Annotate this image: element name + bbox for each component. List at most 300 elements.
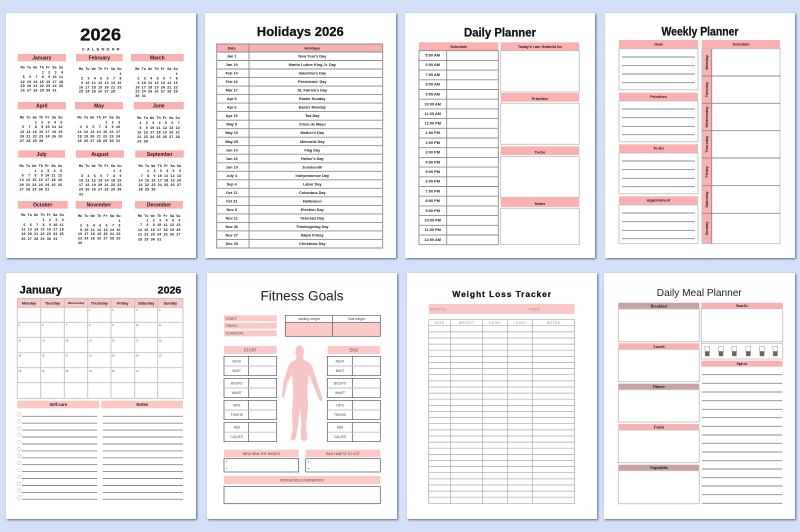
month: April: 6 7 8 9 10 11 12 [20,126,62,130]
section: to-do [501,146,579,197]
month: November: 1 [78,220,120,224]
month: December: Mo Tu We Th Fr Sa Su [138,214,180,219]
section: appointment [619,196,698,244]
month: February [76,54,123,94]
end measurements: THIGHS [334,413,346,417]
schedule table: 5:00 PM [426,170,440,174]
month: September: 21 22 23 24 25 26 27 [138,184,181,188]
month: June: 29 30 [137,140,148,144]
holidays table: Nov 26 [225,225,238,229]
end measurements: HIPS [336,404,344,408]
month grid: 11 [159,324,162,327]
section: dinner: Dinner [653,384,665,389]
schedule table [419,42,498,245]
month grid: 5 [18,324,20,327]
month grid: Thursday [91,301,109,305]
month grid: 18 [159,340,162,342]
month grid: 30 [112,370,115,373]
holidays table: May 10 [225,131,238,135]
month: October [18,201,68,242]
title: weight loss tracker: Weight Loss Tracker [452,289,552,299]
holidays table: Nov 3 [227,208,237,212]
holidays table: July 4 [226,174,238,178]
holidays table: Jun 19 [226,165,238,169]
panel: weight loss tracker [407,273,597,519]
month: May: 11 12 13 14 15 16 17 [78,131,120,135]
month: February: 16 17 18 19 20 21 22 [79,86,121,90]
month: April: 1 2 3 4 5 [20,122,62,126]
month: August: 24 25 26 27 28 29 30 [79,189,121,193]
month grid: Saturday [138,301,155,305]
section: priorities: Priorities [532,97,548,101]
month: July [18,150,65,192]
month: December: 28 29 30 31 [138,238,161,242]
month: May: 4 5 6 7 8 9 10 [78,126,120,130]
month grid: 7 [66,324,68,327]
holidays table: Jun 16 [226,157,238,161]
tracker table: NOTES [547,321,560,325]
month: February: 1 [79,73,121,77]
start measurements: BICEPS [231,382,243,386]
month: June: 22 23 24 25 26 27 28 [137,136,180,140]
month grid: 27 [42,370,45,373]
section: priorities [501,93,579,144]
month grid: 3 [136,309,138,312]
bad habits to cut [306,450,380,472]
month: February: 2 3 4 5 6 7 8 [79,78,121,82]
month: August [76,150,124,198]
month: May: 18 19 20 21 22 23 24 [78,136,121,140]
month: November: 30 [78,242,82,246]
start finish duration fields: DURATION: [226,332,244,336]
section: spices lines [701,361,783,503]
section: notes [501,198,579,244]
panel: january monthly planner [6,273,196,519]
section: breakfast: Breakfast [651,303,668,308]
month grid: 13 [42,340,45,342]
section: to-do: To-Do [653,147,665,151]
heading: 2026: 2026 [158,284,181,296]
month grid: 29 [89,370,92,373]
month: June: Mo Tu We Th Fr Sa Su [137,116,180,121]
month: April: 20 21 22 23 24 25 26 [20,136,62,140]
month grid: 12 [18,340,22,342]
holidays table: Holidays [304,46,320,50]
holidays table: Labor Day [303,182,322,186]
subtitle: calendar: CALENDAR [82,46,120,51]
month: December: 14 15 16 17 18 19 20 [138,229,180,233]
section: grateful [501,42,579,92]
panel: fitness goals [207,273,397,519]
title: 2026: 2026 [80,25,121,45]
title: fitness goals: Fitness Goals [260,288,344,304]
month: January: Mo Tu We Th Fr Sa Su [20,66,63,70]
month: February: 23 24 25 26 27 28 [79,90,115,94]
section: to-do [619,144,698,194]
holidays table: Valentine's Day [298,72,327,76]
month grid: 10 [136,324,139,327]
section: lunch: Lunch [653,344,665,349]
holidays table: Date [228,46,236,50]
january sheet [6,273,196,519]
month: March: 9 10 11 12 13 14 15 [135,82,178,86]
holidays table: Mother's Day [300,131,325,135]
panel: daily meal planner [604,273,795,519]
schedule table: 11:00 PM [425,228,441,232]
month: June: June [153,104,165,110]
month and year bar: YEAR: [528,308,542,312]
schedule table: 11:00 AM [425,112,441,116]
month: October: Mo Tu We Th Fr Sa Su [21,213,64,218]
month: February: February [89,56,110,62]
calendar sheet [6,13,196,258]
month: April [18,102,66,144]
holidays table: Jan 19 [226,63,238,67]
panel: daily planner [405,13,595,258]
section: appointment: Appointment [647,199,671,203]
month grid: 9 [112,324,114,327]
month: May: 1 2 3 [78,122,120,126]
month: August: 3 4 5 6 7 8 9 [79,175,121,179]
month: July: July [37,152,47,158]
section: breakfast [618,303,699,342]
section: schedule [702,40,780,244]
end measurements: WAIST [335,391,345,395]
holidays table: Apr 6 [227,106,237,110]
section: lunch [618,343,699,382]
schedule table: 7:00 AM [425,73,440,77]
section: schedule: Schedule [733,42,749,46]
fitness sheet [207,273,397,519]
month: December [135,201,183,242]
start finish duration fields: FINISH: [226,324,238,328]
month: July: 13 14 15 16 17 18 19 [20,179,62,183]
month: February: 9 10 11 12 13 14 15 [79,82,121,86]
month grid: 15 [89,340,92,342]
tracker table [429,320,575,504]
month: November: 9 10 11 12 13 14 15 [78,229,120,233]
tracker sheet [407,273,597,519]
month: March: 16 17 18 19 20 21 22 [135,86,178,90]
holidays table: Jan 1 [227,55,237,59]
holidays table: St. Patrick's Day [297,89,328,93]
month: September [135,150,184,193]
icon: body silhouette [282,345,323,441]
month: February: Mo Tu We Th Fr Sa Su [79,67,121,72]
title: daily planner: Daily Planner [464,28,537,40]
month: July: 20 21 22 23 24 25 26 [20,184,62,188]
start finish duration fields: START: [226,317,237,321]
month: May [75,102,123,144]
holidays table: Apr 5 [227,97,237,101]
end measurements: BUST [336,369,344,373]
month grid: 8 [89,324,91,327]
start measurements: BUST [232,369,241,373]
weight table: starting weight [298,317,320,321]
holidays table [217,44,383,248]
month grid: 25 [159,354,162,358]
panel: yearly calendar 2026 [6,13,196,258]
holidays sheet [205,13,396,258]
month: May: May [94,104,104,110]
holidays table: Thanksgiving Day [296,225,329,229]
month grid: 21 [66,354,69,358]
month: November [76,201,122,246]
section: schedule: Tuesday [705,81,709,97]
month: June [134,102,184,144]
month grid: 16 [112,340,115,342]
holidays table: Dec 25 [226,242,238,246]
bad habits to cut: BAD HABITS TO CUT [326,452,360,456]
start finish duration fields [224,315,277,336]
holidays table: Cinco de Mayo [299,123,326,127]
schedule table: 2:00 PM [426,141,440,145]
month grid: Monday [22,301,37,305]
weight table [285,315,380,336]
month: August: Mo Tu We Th Fr Sa Su [79,164,121,169]
month: April: April [36,104,48,110]
month: January: January [32,56,52,62]
section: spices lines: Spices [737,361,748,366]
tracker table: WEIGHT [459,321,475,325]
holidays table: Memorial Day [300,140,326,144]
month and year bar [429,304,575,314]
panel: weekly planner [605,13,795,258]
holidays table: Sep 4 [227,182,238,186]
title: holidays 2026: Holidays 2026 [257,24,344,39]
month grid: 20 [42,354,45,358]
section: schedule: Sunday [705,221,709,235]
start measurements [224,346,277,442]
section: notes lines: Notes [136,402,149,407]
month grid: Wednesday [68,301,85,305]
month grid: 6 [42,324,44,327]
section: schedule: Monday [705,54,709,69]
month: December: December [147,203,171,209]
month and year bar: MONTH: [430,308,448,312]
month: July: 6 7 8 9 10 11 12 [20,174,62,178]
holidays table: Christmas Day [299,242,326,246]
month grid: Friday [117,301,129,305]
month: March: Mo Tu We Th Fr Sa Su [135,67,178,72]
month: December: 1 2 3 4 5 6 [138,220,180,224]
section: priorities: Priorities [650,95,667,99]
month: March: 30 31 [135,95,146,99]
month: July: 27 28 29 30 31 [20,188,49,192]
start measurements: ABS [234,426,240,430]
section: notes lines [101,401,183,499]
month: October: 19 20 21 22 23 24 25 [21,233,64,237]
holidays table: Oct 31 [226,199,238,203]
month: September: 7 8 9 10 11 12 13 [138,175,181,179]
schedule table: 6:00 AM [425,63,440,67]
start measurements: WAIST [232,391,242,395]
month grid: 24 [136,354,139,358]
month: October: 26 27 28 29 30 31 [21,238,57,242]
end measurements: END [350,348,358,353]
holidays table: May 25 [225,140,238,144]
end measurements: ABS [337,426,343,430]
section: priorities [619,93,698,142]
month: August: 10 11 12 13 14 15 16 [79,179,121,183]
daily planner sheet [405,13,595,258]
section: snacks: Snacks [736,303,748,308]
month grid: 2 [112,309,114,312]
section: fruits: Fruits [654,424,665,430]
holidays table: Independence Day [296,174,330,178]
month: January: 5 6 7 8 9 10 11 [20,76,63,80]
month: January: 19 20 21 22 23 24 25 [20,85,63,89]
water glasses tracker [701,343,783,359]
month: January: 12 13 14 15 16 17 18 [20,81,63,85]
month: November: 16 17 18 19 20 21 22 [78,233,120,237]
section: fruits [618,424,699,463]
section: goal [619,40,698,90]
holidays table: Juneteenth [302,165,323,169]
weight table: final weight [348,317,365,321]
schedule table: 4:00 PM [426,160,440,164]
month: March: March [150,55,165,61]
month: March: 1 [135,73,178,77]
month: September: 1 2 3 4 5 6 [138,170,181,174]
month: August: August [91,152,109,158]
schedule table: 12:00 PM [424,122,441,126]
holidays table: Martin Luther King Jr. Day [289,63,337,67]
section: dinner [618,384,699,422]
start measurements: THIGHS [231,413,243,417]
weekly planner sheet [605,13,795,258]
section: schedule: Saturday [705,190,709,208]
holidays table: Oct 12 [226,191,238,195]
holidays table: Nov 11 [226,216,238,220]
month: January [18,54,66,94]
section: snacks [701,303,783,342]
holidays table: Flag Day [304,148,321,152]
month grid: Tuesday [45,301,61,305]
month grid: 17 [136,340,139,342]
month grid: 23 [112,354,115,358]
month grid: 19 [18,354,22,358]
month: July: Mo Tu We Th Fr Sa Su [20,164,62,169]
holidays table: Tax Day [305,114,320,118]
holidays table: Mar 17 [226,89,238,93]
month: September: Mo Tu We Th Fr Sa Su [138,164,181,169]
end measurements [327,346,380,442]
tracker table: GAIN+ [489,321,501,325]
start measurements: START [244,348,257,353]
holidays table: Veterans Day [300,216,325,220]
holidays table: May 5 [226,123,237,127]
month: December: 7 8 9 10 11 12 13 [138,224,180,228]
month: November: 23 24 25 26 27 28 29 [78,238,120,242]
tracker table: LOSS+ [514,321,526,325]
meal planner sheet [604,273,795,519]
start measurements: HIPS [233,404,240,408]
month: March [131,54,184,99]
month: January: 1 2 3 4 [20,72,64,76]
section: schedule: Thursday [705,135,709,153]
schedule table: 12:00 AM [424,238,441,242]
month grid: 31 [136,370,139,373]
holidays table: Election Day [301,208,325,212]
schedule table: Schedule [450,45,467,49]
month: July: 1 2 3 4 5 [20,170,62,174]
month: September: 28 29 30 [138,189,156,193]
schedule table: 9:00 PM [426,209,440,213]
motivation and inspiration: MOTIVATION & INSPIRATION [280,478,324,482]
holidays table: Nov 27 [225,234,238,238]
month: March: 2 3 4 5 6 7 8 [135,78,178,82]
month: September: 14 15 16 17 18 19 20 [138,179,181,183]
schedule table: 10:00 PM [424,218,441,222]
holidays table: Columbus Day [299,191,326,195]
section: schedule: Friday [705,165,709,178]
new healthy habits: NEW HEALTHY HABITS [243,452,281,456]
holidays table: Father's Day [301,157,325,161]
section: self-care checklist [17,401,99,499]
schedule table: 6:00 PM [426,180,440,184]
section: schedule: Wednesday [705,106,709,128]
schedule table: 7:00 PM [426,189,440,193]
schedule table: 5:00 AM [425,54,440,58]
month: August: 1 2 [79,170,121,174]
month: October: 12 13 14 15 16 17 18 [21,228,64,232]
month: April: Mo Tu We Th Fr Sa Su [20,116,62,120]
month: March: 23 24 25 26 27 28 29 [135,90,178,94]
end measurements: BICEPS [334,382,346,386]
holidays table: Apr 15 [226,114,238,118]
month: August: 31 [79,194,83,198]
month grid: 14 [66,340,69,342]
month: April: 27 28 29 30 [20,140,43,144]
schedule table: 1:00 PM [426,131,440,135]
schedule table: 8:00 PM [426,199,440,203]
month grid: Sunday [163,301,178,305]
title: daily meal planner: Daily Meal Planner [657,287,742,299]
end measurements: CALVES [334,435,346,439]
tracker table: DATE [435,321,445,325]
panel: holidays 2026 [205,13,396,258]
month grid: 22 [89,354,92,358]
month grid: 28 [66,370,69,373]
schedule table: 10:00 AM [424,102,441,106]
month: November: November [87,203,111,209]
section: to-do: To-Do [535,150,546,154]
holidays table: Feb 14 [226,72,239,76]
end measurements: NECK [336,360,345,364]
section: grateful: Today's I am Grateful for [518,45,563,49]
month grid: 4 [159,309,161,312]
month: August: 17 18 19 20 21 22 23 [79,184,121,188]
holidays table: Easter Sunday [299,97,326,101]
month: June: 8 9 10 11 12 13 14 [137,127,181,131]
section: notes: Notes [535,202,545,206]
month: November: Mo Tu We Th Fr Sa Su [78,214,120,219]
month: October: 5 6 7 8 9 10 11 [21,224,64,228]
section: goal: Goal [654,42,663,46]
month grid: 1 [89,309,91,312]
holidays table: Feb 16 [226,80,238,84]
holidays table: Jun 14 [226,148,239,152]
holidays table: New Year's Day [298,55,327,59]
month: May: Mo Tu We Th Fr Sa Su [78,116,120,120]
month: October: October [33,203,52,209]
month grid: 26 [18,370,22,373]
month: September: September [147,152,173,158]
title: weekly planner: Weekly Planner [662,26,739,38]
month: December: 21 22 23 24 25 26 27 [138,234,180,238]
start measurements: NECK [232,360,242,364]
